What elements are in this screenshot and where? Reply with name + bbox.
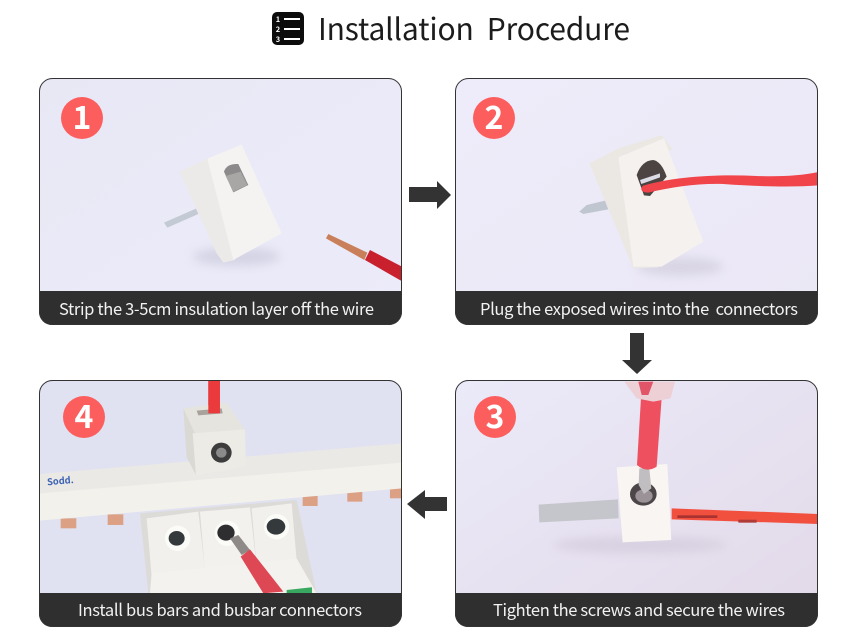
icon: numbered list [272, 12, 304, 45]
icon: numbered list: 2 [276, 24, 281, 35]
badge: 3 [474, 392, 516, 438]
photo: connector and stripped wire [164, 145, 402, 281]
photo: wire plugged into connector [579, 135, 819, 276]
arrow: step 1 to 2 [409, 181, 451, 209]
badge: 4 [63, 392, 105, 438]
caption: step 4: Install bus bars and busbar connectors [78, 597, 362, 621]
icon: numbered list: 3 [276, 34, 280, 45]
badge: 2: 2 [485, 93, 503, 139]
photo: busbar and breaker: Sodd. [46, 472, 74, 488]
panel: step 4 [39, 380, 403, 627]
badge: 4: 4 [75, 392, 93, 438]
caption: step 1: Strip the 3-5cm insulation layer off the wire [59, 296, 374, 320]
photo: busbar and breaker [40, 380, 403, 593]
panel: step 3 [455, 380, 819, 627]
photo: screwdriver tightening connector [539, 382, 819, 554]
badge: 1 [61, 93, 103, 139]
caption: step 3: Tighten the screws and secure the wires [493, 597, 785, 621]
icon: numbered list: 1 [276, 14, 280, 25]
arrow: step 2 to 3 [622, 333, 652, 374]
title: Installation Procedure [318, 5, 630, 49]
badge: 1: 1 [73, 93, 91, 139]
panel: step 1 [39, 78, 402, 325]
arrow: step 3 to 4 [407, 490, 447, 519]
badge: 3: 3 [486, 392, 504, 438]
badge: 2 [473, 93, 515, 139]
caption: step 2: Plug the exposed wires into the connectors [480, 296, 798, 320]
panel: step 2 [455, 78, 819, 325]
